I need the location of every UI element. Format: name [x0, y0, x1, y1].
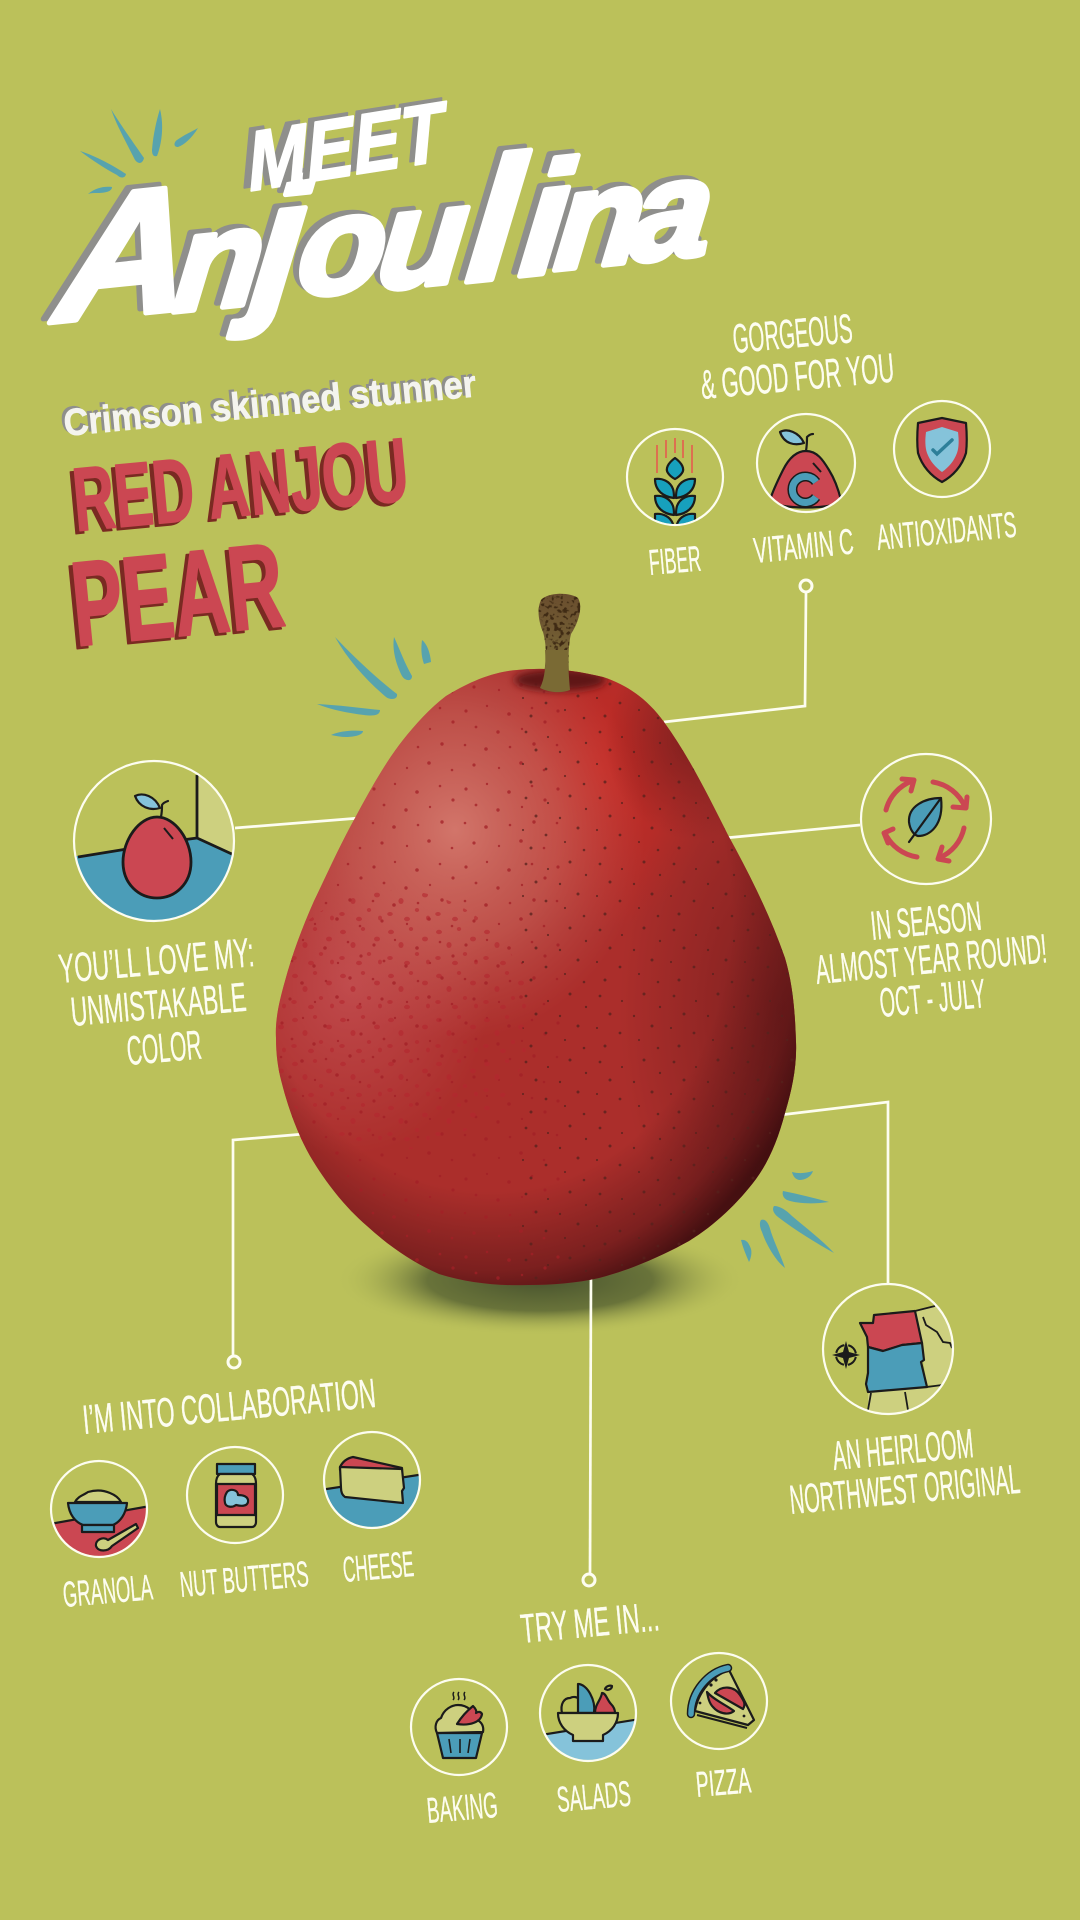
- text: you'll love my unmistakable color: YOU’LL LOVE MY:: [57, 929, 256, 992]
- connector: heirloom to pear: [780, 1102, 888, 1285]
- pear shadow: [335, 1224, 745, 1336]
- pear stem: [538, 594, 580, 671]
- text: you'll love my unmistakable color: [57, 929, 256, 1074]
- pear photo: [276, 594, 796, 1286]
- connector: color to pear: [235, 818, 360, 828]
- connector: vitamin c to pear: [664, 580, 812, 722]
- title: MEET: MEET: [238, 80, 447, 206]
- heading: PEAR: PEAR: [61, 521, 286, 675]
- sparkle: upper left of pear: [317, 637, 431, 737]
- heading: PEAR: [61, 518, 290, 675]
- label: nut butters: NUT BUTTERS: [178, 1553, 310, 1605]
- connector: collaboration to pear: [228, 1134, 304, 1368]
- label: fiber: FIBER: [647, 538, 702, 583]
- icon: unmistakable color pear: [70, 761, 237, 925]
- label: granola: GRANOLA: [61, 1566, 154, 1615]
- icon: vitamin c pear: [757, 414, 855, 512]
- icon: antioxidants shield: [894, 401, 990, 497]
- heading: RED ANJOU: RED ANJOU: [69, 420, 412, 551]
- heading: gorgeous and good for you: & GOOD FOR YOU: [699, 345, 896, 408]
- heading: RED ANJOU: [65, 420, 412, 554]
- heading: gorgeous and good for you: [699, 305, 896, 408]
- icon: cheese wedge: [322, 1430, 422, 1530]
- heading: collaboration: I’M INTO COLLABORATION: [81, 1370, 378, 1443]
- icon: baking cupcake: [411, 1679, 507, 1775]
- label: salads: SALADS: [555, 1773, 632, 1820]
- icon: pizza slice: [671, 1653, 767, 1749]
- label: pizza: PIZZA: [694, 1759, 752, 1805]
- title: Anjoulina: Anjoulina: [24, 119, 739, 361]
- title: MEET: MEET: [245, 83, 452, 209]
- infographic canvas: CHEESE: [341, 1543, 415, 1590]
- icon: fiber wheat: [627, 429, 723, 533]
- heading: try me in: TRY ME IN...: [519, 1593, 661, 1652]
- connector: season to pear: [725, 825, 860, 838]
- title: Anjoulina: Anjoulina: [18, 115, 733, 357]
- icon: granola: [50, 1461, 150, 1560]
- icon: season cycle with leaf: [861, 754, 991, 884]
- heading: PEAR: PEAR: [65, 518, 290, 672]
- sparkle: title: [80, 109, 198, 194]
- connector: try me in to pear: [583, 1270, 595, 1586]
- heading: gorgeous and good for you: GORGEOUS: [731, 305, 854, 362]
- heading: RED ANJOU: RED ANJOU: [65, 423, 408, 554]
- icon: nut butters jar: [187, 1447, 283, 1543]
- subtitle: Crimson skinned stunner: Crimson skinned stunner: [59, 361, 475, 443]
- text: in season: [814, 893, 1049, 1026]
- label: baking: BAKING: [425, 1784, 499, 1831]
- text: you'll love my unmistakable color: COLOR: [125, 1022, 203, 1074]
- sparkle: lower right of pear: [741, 1171, 834, 1268]
- icon: salads bowl: [538, 1664, 638, 1762]
- subtitle: Crimson skinned stunner: Crimson skinned stunner: [62, 363, 478, 445]
- label: vitamin c: VITAMIN C: [752, 521, 855, 571]
- icon: northwest map: [823, 1284, 960, 1425]
- text: you'll love my unmistakable color: UNMISTAKABLE: [69, 974, 248, 1035]
